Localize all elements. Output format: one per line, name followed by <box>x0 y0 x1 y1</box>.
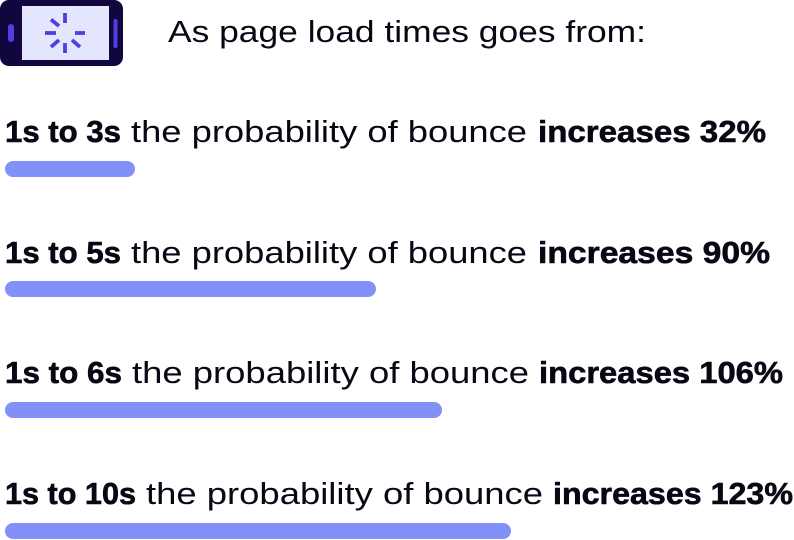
row: 1s to 6s <box>5 355 783 418</box>
label: 1s to 5s text: increases 90% <box>538 235 770 270</box>
label: 1s to 5s text <box>5 235 770 270</box>
label: 1s to 3s text: the probability of bounce <box>131 114 527 149</box>
bar: 90% <box>5 281 376 297</box>
label: 1s to 3s text: increases 32% <box>538 114 766 149</box>
label: 1s to 6s text: the probability of bounce <box>132 355 529 390</box>
bar: 123% <box>5 523 511 539</box>
bar: 106% <box>5 402 442 418</box>
label: 1s to 10s text <box>5 476 793 511</box>
label: 1s to 10s text: increases 123% <box>553 476 793 511</box>
label: 1s to 6s text <box>5 355 783 390</box>
label: 1s to 5s text: 1s to 5s <box>5 235 121 270</box>
icon: phone with loading spinner <box>0 0 123 66</box>
row: 1s to 3s <box>5 114 766 177</box>
label: 1s to 6s text: 1s to 6s <box>5 355 122 390</box>
row: 1s to 5s <box>5 235 770 297</box>
label: 1s to 10s text: 1s to 10s <box>5 476 136 511</box>
label: 1s to 5s text: the probability of bounce <box>131 235 527 270</box>
heading: As page load times goes from: <box>168 14 646 49</box>
label: 1s to 3s text <box>5 114 766 149</box>
label: 1s to 3s text: 1s to 3s <box>5 114 121 149</box>
label: 1s to 6s text: increases 106% <box>539 355 783 390</box>
bar: 32% <box>5 161 135 177</box>
row: 1s to 10s <box>5 476 793 539</box>
label: 1s to 10s text: the probability of bounce <box>146 476 543 511</box>
